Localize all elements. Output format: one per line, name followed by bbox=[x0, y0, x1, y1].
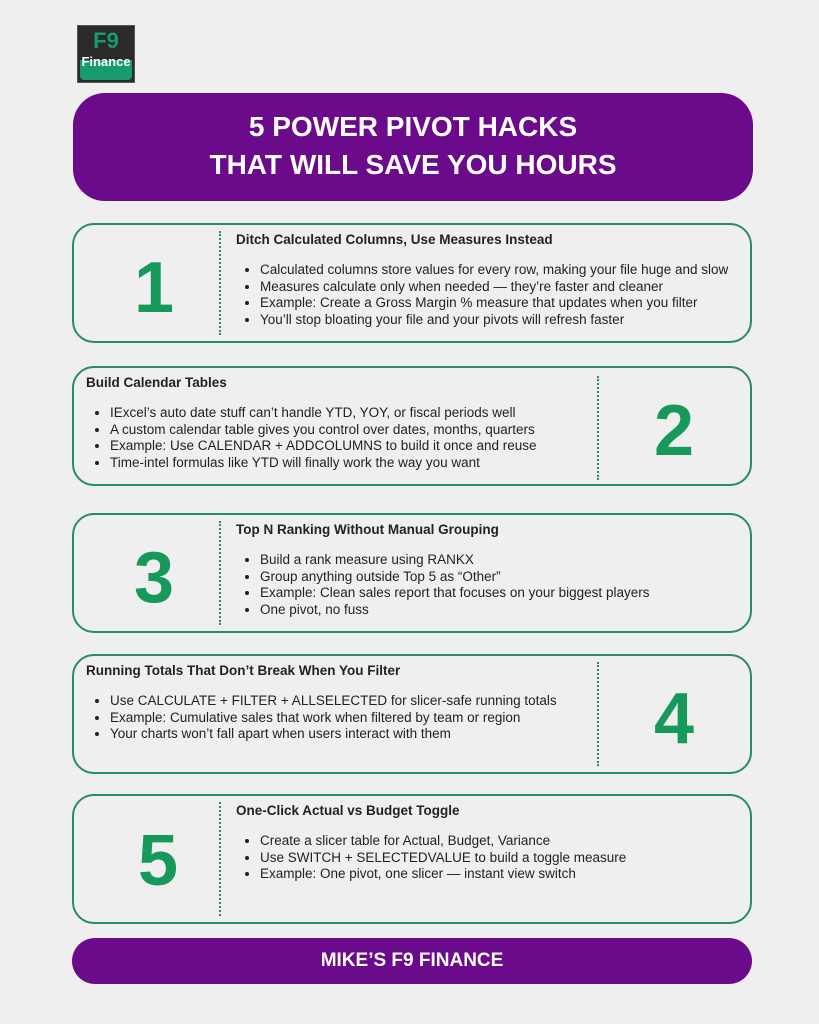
card 5 bbox=[72, 794, 752, 924]
card 1: Ditch Calculated Columns, Use Measures Instead bbox=[236, 232, 553, 247]
card 3: Example: Clean sales report that focuses on your biggest players bbox=[260, 585, 649, 600]
logo: F9 bbox=[93, 28, 119, 53]
card 5: Use SWITCH + SELECTEDVALUE to build a toggle measure bbox=[260, 850, 626, 864]
card 1: 1 bbox=[134, 248, 174, 328]
card 3: 3 bbox=[134, 538, 174, 618]
footer banner bbox=[72, 938, 752, 984]
card 1: Measures calculate only when needed — they’re faster and cleaner bbox=[260, 278, 663, 294]
card 4: Use CALCULATE + FILTER + ALLSELECTED for slicer-safe running totals bbox=[110, 693, 557, 708]
card 4: 4 bbox=[654, 679, 694, 759]
footer banner: MIKE’S F9 FINANCE bbox=[321, 950, 503, 971]
card 2: Example: Use CALENDAR + ADDCOLUMNS to build it once and reuse bbox=[110, 438, 537, 453]
card 3: One pivot, no fuss bbox=[260, 602, 369, 616]
card 2 bbox=[72, 366, 752, 486]
card 5: 5 bbox=[138, 821, 178, 901]
card 2: IExcel’s auto date stuff can’t handle YTD, YOY, or fiscal periods well bbox=[110, 405, 515, 420]
card 2: Build Calendar Tables bbox=[86, 375, 227, 390]
card 2: Time-intel formulas like YTD will finally work the way you want bbox=[110, 454, 480, 470]
title banner: THAT WILL SAVE YOU HOURS bbox=[209, 149, 617, 180]
logo bbox=[77, 25, 135, 83]
card 2: 2 bbox=[654, 391, 694, 471]
card 5: Create a slicer table for Actual, Budget, Variance bbox=[260, 833, 550, 848]
card 4: Your charts won’t fall apart when users interact with them bbox=[110, 726, 451, 741]
card 3: Top N Ranking Without Manual Grouping bbox=[236, 522, 499, 537]
card 1: Calculated columns store values for every row, making your file huge and slow bbox=[260, 262, 728, 277]
card 1 bbox=[72, 223, 752, 343]
card 3: Group anything outside Top 5 as “Other” bbox=[260, 568, 501, 584]
card 4: Example: Cumulative sales that work when filtered by team or region bbox=[110, 710, 520, 724]
card 1: Example: Create a Gross Margin % measure that updates when you filter bbox=[260, 295, 697, 310]
card 4 bbox=[72, 654, 752, 774]
title banner: 5 POWER PIVOT HACKS bbox=[249, 111, 577, 142]
card 1: You’ll stop bloating your file and your pivots will refresh faster bbox=[260, 312, 624, 326]
card 4: Running Totals That Don’t Break When You Filter bbox=[86, 663, 400, 678]
card 3: Build a rank measure using RANKX bbox=[260, 552, 474, 567]
card 3 bbox=[72, 513, 752, 633]
card 2: A custom calendar table gives you control over dates, months, quarters bbox=[110, 422, 535, 436]
title banner bbox=[73, 93, 753, 201]
card 5: Example: One pivot, one slicer — instant view switch bbox=[260, 866, 576, 881]
card 5: One-Click Actual vs Budget Toggle bbox=[236, 803, 460, 818]
logo: Finance bbox=[81, 54, 131, 69]
